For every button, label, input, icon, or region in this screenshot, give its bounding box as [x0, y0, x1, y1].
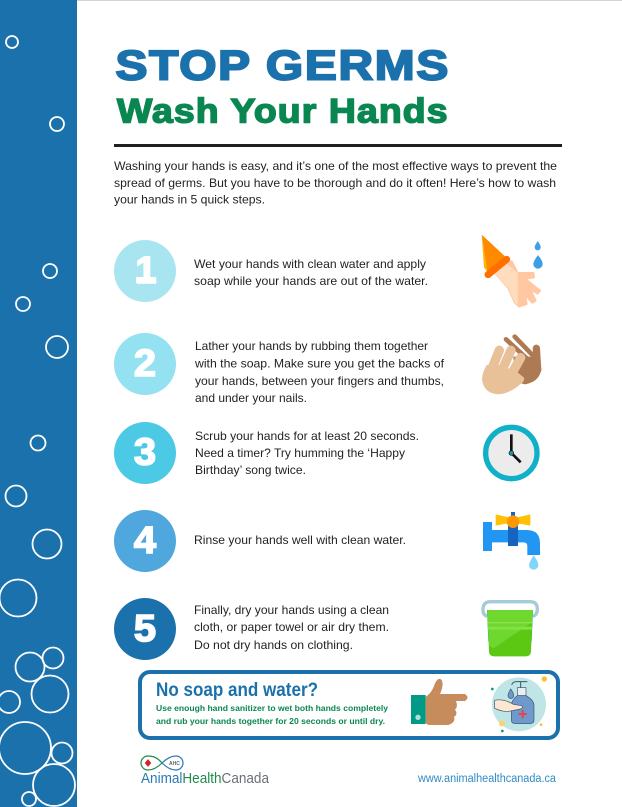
step 2 text: and under your nails. [195, 391, 307, 405]
step 3 text: Need a timer? Try humming the ‘Happy [195, 446, 405, 460]
logo: Animal Health Canada [141, 756, 270, 787]
icon: clock [486, 427, 537, 479]
logo mark: AHC [169, 761, 180, 767]
intro text [114, 159, 557, 206]
step 4 badge: 4 [134, 520, 156, 562]
icon: tap with drop [483, 512, 540, 570]
step 1 text [194, 257, 428, 288]
step 2 text [194, 339, 445, 405]
intro text: Washing your hands is easy, and it’s one of the most effective ways to prevent the [114, 159, 557, 173]
step 5 badge: 5 [134, 608, 156, 650]
step 2 text: your hands, between your fingers and thumbs, [195, 374, 444, 388]
step 4 text: Rinse your hands well with clean water. [194, 533, 406, 547]
step 5 text: Finally, dry your hands using a clean [194, 603, 389, 617]
icon: hand sanitizer [491, 676, 547, 732]
step 1 text: Wet your hands with clean water and apply [194, 257, 426, 271]
callout text: and rub your hands together for 20 seconds or until dry. [156, 716, 385, 726]
intro text: your hands in 5 quick steps. [114, 192, 265, 206]
icon: green bucket [483, 602, 537, 656]
icon: hand under water [482, 235, 543, 307]
step 3 badge: 3 [134, 431, 156, 473]
step 2 text: with the soap. Make sure you get the backs of [194, 356, 445, 370]
intro text: spread of germs. But you have to be thorough and do it often! Here’s how to wash [114, 176, 556, 190]
step 5 badge [114, 598, 176, 660]
icon: pointing hand [411, 679, 467, 725]
icon: lathering hands [482, 337, 541, 394]
callout text [156, 703, 388, 726]
callout heading: No soap and water? [156, 680, 318, 701]
step 4 badge [114, 510, 176, 572]
step 5 text: cloth, or paper towel or air dry them. [194, 620, 389, 634]
step 3 text [195, 429, 419, 477]
subtitle: wash your hands: Wash Your Hands [117, 92, 449, 130]
step 1 badge: 1 [135, 250, 157, 292]
step 3 text: Scrub your hands for at least 20 seconds. [195, 429, 419, 443]
step 2 badge: 2 [134, 343, 156, 385]
sidebar with bubbles [0, 0, 77, 807]
step 5 text: Do not dry hands on clothing. [194, 638, 353, 652]
step 5 text [194, 603, 389, 652]
step 1 text: soap while your hands are out of the water. [194, 274, 428, 288]
step 2 badge [114, 333, 176, 395]
step 3 text: Birthday’ song twice. [195, 463, 306, 477]
title: stop germs: STOP GERMS [116, 41, 450, 89]
callout text: Use enough hand sanitizer to wet both hands completely [156, 703, 388, 713]
logo wordmark: AnimalHealthCanada [141, 771, 270, 787]
callout: no soap and water [140, 672, 558, 738]
step 3 badge [114, 422, 176, 484]
step 2 text: Lather your hands by rubbing them together [195, 339, 428, 353]
step 1 badge [114, 240, 176, 302]
website url: www.animalhealthcanada.ca [417, 773, 557, 785]
